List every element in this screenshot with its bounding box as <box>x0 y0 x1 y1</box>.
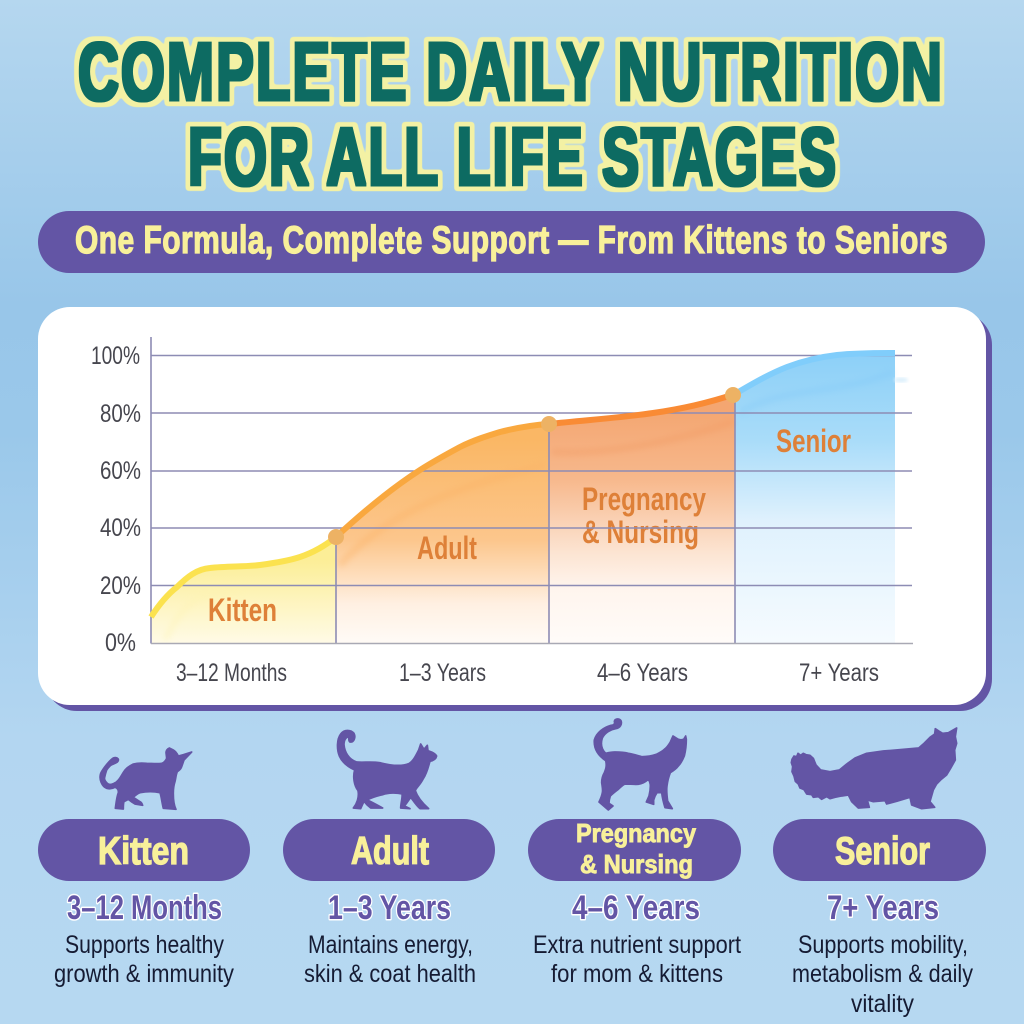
x axis labels: 4–6 Years <box>597 659 688 687</box>
senior description: Supports mobility, <box>798 931 968 959</box>
kitten description: growth & immunity <box>54 960 234 988</box>
senior age: 7+ Years <box>827 889 939 927</box>
y axis labels: 80% <box>100 400 141 428</box>
curve <box>151 353 895 617</box>
chart <box>91 337 913 687</box>
adult description: Maintains energy, <box>308 931 473 959</box>
pregnancy pill: & Nursing <box>580 849 693 879</box>
senior description: metabolism & daily <box>792 960 973 988</box>
adult description: skin & coat health <box>304 960 476 988</box>
area: pregnancy and nursing <box>549 394 735 644</box>
x axis labels: 7+ Years <box>799 659 879 687</box>
senior description <box>792 931 973 1018</box>
stage labels: Pregnancy <box>582 481 706 517</box>
panel: senior <box>773 819 986 1018</box>
soft highlight <box>165 372 893 640</box>
x axis labels <box>176 659 879 687</box>
area: adult <box>336 424 549 644</box>
panel: adult <box>283 819 495 988</box>
kitten pill <box>38 819 250 881</box>
y axis labels: 60% <box>100 457 141 485</box>
icon: kitten silhouette <box>100 748 192 809</box>
subtitle banner <box>38 211 985 273</box>
panel: pregnancy and nursing <box>528 818 741 988</box>
area: kitten <box>151 537 336 644</box>
senior pill: Senior <box>835 830 930 873</box>
icon: pregnant cat silhouette <box>594 719 686 810</box>
kitten description <box>54 931 234 988</box>
adult description <box>304 931 476 988</box>
stage labels: Adult <box>417 530 477 566</box>
adult pill <box>283 819 495 881</box>
stage labels: Senior <box>776 423 851 459</box>
y axis labels: 100% <box>91 342 140 370</box>
y axis labels: 40% <box>100 514 141 542</box>
panel: kitten <box>38 819 250 988</box>
icon: adult cat silhouette <box>337 730 437 809</box>
pregnancy description: Extra nutrient support <box>533 931 741 959</box>
title <box>78 25 944 203</box>
y axis labels: 20% <box>100 572 141 600</box>
pregnancy description <box>533 931 741 988</box>
faint blue smudge <box>894 378 908 382</box>
kitten age: 3–12 Months <box>67 889 222 927</box>
adult age: 1–3 Years <box>328 889 451 927</box>
stage labels: Kitten <box>208 592 277 628</box>
curve markers <box>328 387 741 545</box>
area: senior <box>735 353 895 644</box>
stage labels <box>208 423 851 628</box>
x axis labels: 3–12 Months <box>176 659 287 687</box>
y axis labels <box>91 342 141 657</box>
panel: chart card <box>38 307 992 711</box>
senior description: vitality <box>851 990 914 1018</box>
adult pill: Adult <box>351 830 429 873</box>
kitten pill: Kitten <box>98 830 189 873</box>
stage labels: & Nursing <box>582 514 699 550</box>
pregnancy age: 4–6 Years <box>572 889 700 927</box>
kitten description: Supports healthy <box>65 931 224 959</box>
icon: senior cat silhouette <box>791 728 957 809</box>
y axis labels: 0% <box>105 629 136 657</box>
pregnancy pill <box>528 818 741 881</box>
x axis labels: 1–3 Years <box>399 659 486 687</box>
pregnancy description: for mom & kittens <box>551 960 723 988</box>
senior pill <box>773 819 986 881</box>
pregnancy pill: Pregnancy <box>576 818 696 848</box>
